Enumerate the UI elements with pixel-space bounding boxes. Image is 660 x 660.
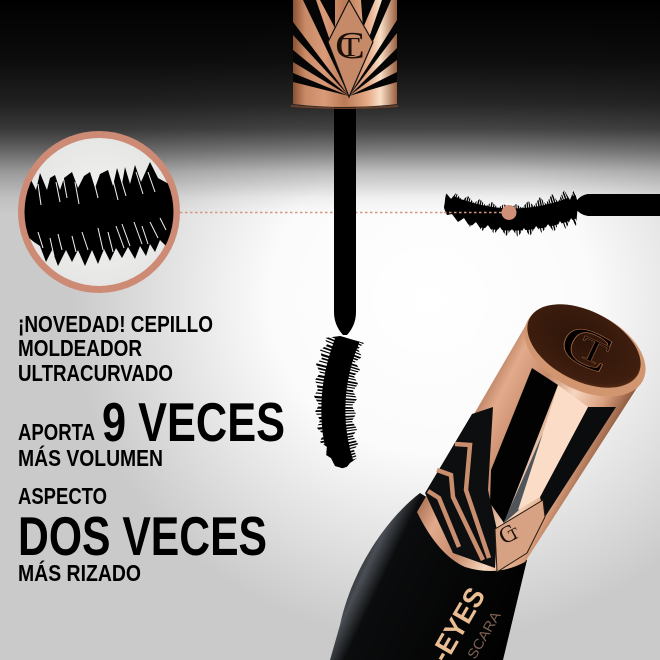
- large mascara tube: [330, 287, 660, 660]
- mascara wand: vertical with cap: [291, 0, 398, 470]
- dotted callout line: [180, 212, 505, 214]
- black deco panel: right wedge: [540, 407, 616, 517]
- dotted line on brush: [444, 212, 504, 214]
- text block: curl claim: ASPECTO: [18, 483, 107, 509]
- wand cap with art deco pattern: [293, 0, 397, 110]
- diamond with monogram: C: [495, 520, 521, 550]
- cream highlight: [518, 385, 588, 510]
- centre wedge sheen: [503, 433, 543, 524]
- diamond with monogram: [495, 500, 545, 572]
- wand stem: [334, 104, 356, 335]
- text block: curl claim: [18, 483, 267, 586]
- text block: new brush: ¡NOVEDAD! CEPILLO: [18, 311, 213, 337]
- text block: volume claim: MÁS VOLUMEN: [18, 444, 163, 471]
- text block: volume claim: 9 VECES: [102, 391, 285, 453]
- curved brush: [332, 336, 350, 470]
- cap top: [509, 287, 660, 415]
- text block: new brush: [18, 311, 213, 386]
- cap monogram: T: [340, 32, 361, 62]
- handle: [575, 194, 660, 216]
- cap rim: [291, 105, 398, 109]
- mascara wand: horizontal: [442, 194, 660, 220]
- copper chevron stripes: [428, 444, 489, 560]
- magnified lens circle: [22, 134, 176, 290]
- black deco panel: left chevrons: [425, 407, 497, 568]
- small brush: [442, 203, 580, 220]
- text block: volume claim: APORTA: [18, 419, 95, 445]
- magnified brush: [22, 162, 176, 266]
- black tube body: [330, 493, 527, 660]
- cap monogram: C: [335, 25, 365, 67]
- embossed monogram on cap: C: [551, 311, 622, 385]
- copper collar and cap: [417, 323, 642, 571]
- text block: curl claim: DOS VECES: [18, 505, 267, 567]
- diamond with monogram: T: [506, 525, 523, 545]
- callout dot: [502, 205, 516, 220]
- text block: curl claim: MÁS RIZADO: [18, 559, 141, 586]
- text block: new brush: MOLDEADOR: [18, 335, 142, 361]
- text block: new brush: ULTRACURVADO: [18, 360, 173, 386]
- black deco panel: centre wedge: [490, 368, 558, 523]
- text block: volume claim: [18, 391, 285, 471]
- embossed monogram on cap: T: [572, 329, 614, 373]
- cap diamond: [328, 0, 373, 97]
